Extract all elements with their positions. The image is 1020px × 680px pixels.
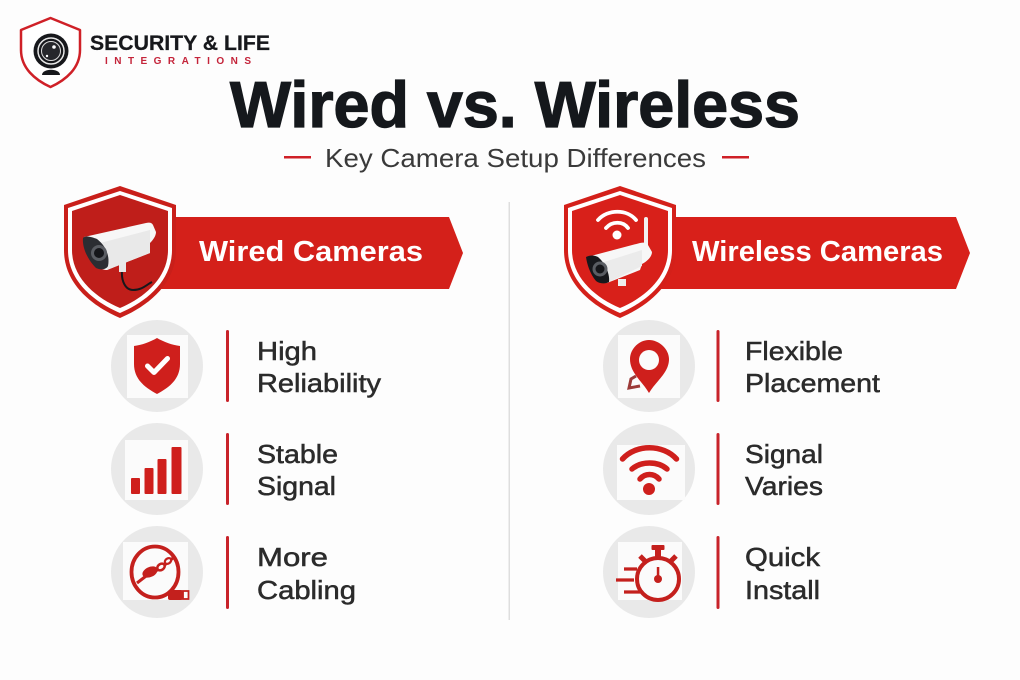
feature: quick install bbox=[603, 526, 821, 618]
feature: quick install: Install bbox=[745, 575, 820, 605]
panel: wireless cameras bbox=[564, 186, 970, 618]
logo tagline: INTEGRATIONS bbox=[105, 56, 257, 67]
title: Wired vs. Wireless bbox=[230, 68, 800, 141]
icon: logo shield with camera bbox=[21, 18, 80, 87]
camera cable bbox=[122, 270, 152, 290]
banner: wired cameras: Wired Cameras bbox=[199, 236, 423, 268]
feature: high reliability: High bbox=[257, 336, 317, 366]
feature: high reliability bbox=[111, 320, 381, 412]
feature: flexible placement bbox=[603, 320, 881, 412]
feature: stable signal: Stable bbox=[257, 439, 338, 469]
feature: more cabling: More bbox=[257, 542, 328, 572]
logo bbox=[21, 18, 270, 87]
feature: stable signal: Signal bbox=[257, 471, 336, 501]
icon: signal bars bbox=[111, 423, 203, 515]
center divider bbox=[508, 202, 510, 620]
feature: more cabling: Cabling bbox=[257, 575, 356, 605]
wifi symbol bbox=[598, 212, 636, 220]
antenna bbox=[644, 217, 648, 247]
icon: location pin bbox=[603, 320, 695, 412]
feature: signal varies bbox=[603, 423, 823, 515]
logo name: SECURITY & LIFE bbox=[90, 32, 270, 55]
feature: quick install: Quick bbox=[745, 542, 821, 572]
icon: stopwatch bbox=[603, 526, 695, 618]
feature: signal varies: Varies bbox=[745, 471, 823, 501]
panel: wired cameras bbox=[64, 186, 463, 618]
icon: wifi bbox=[603, 423, 695, 515]
icon: shield with wireless camera bbox=[564, 186, 676, 318]
icon: coiled cable bbox=[111, 526, 203, 618]
feature: more cabling bbox=[111, 526, 356, 618]
icon: shield with wired camera bbox=[64, 186, 176, 318]
banner: wireless cameras bbox=[659, 217, 970, 289]
subtitle: Key Camera Setup Differences bbox=[325, 143, 706, 173]
banner: wired cameras bbox=[160, 217, 463, 289]
feature: high reliability: Reliability bbox=[257, 368, 381, 398]
icon: shield with check bbox=[111, 320, 203, 412]
feature: flexible placement: Flexible bbox=[745, 336, 843, 366]
banner: wireless cameras: Wireless Cameras bbox=[692, 236, 943, 268]
feature: stable signal bbox=[111, 423, 338, 515]
camera body bbox=[587, 243, 652, 283]
camera body bbox=[84, 223, 156, 270]
feature: signal varies: Signal bbox=[745, 439, 823, 469]
feature: flexible placement: Placement bbox=[745, 368, 881, 398]
